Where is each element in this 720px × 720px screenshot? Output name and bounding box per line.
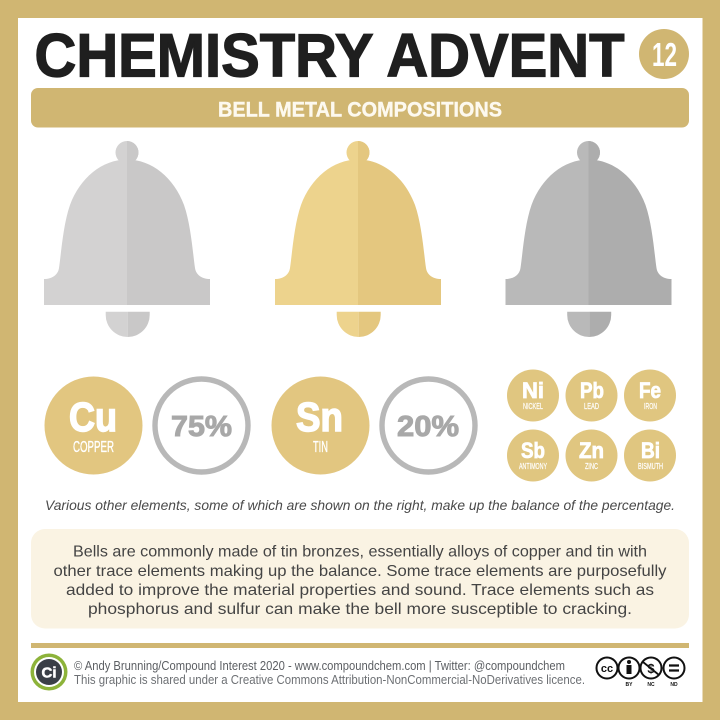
tin percentage ring: 20% — [397, 411, 459, 443]
licence icons: ND — [670, 682, 678, 688]
bell: copper-grey — [44, 141, 210, 337]
day number badge: 12 — [652, 36, 677, 73]
explanation panel: added to improve the material properties and sound. Trace elements such as — [66, 582, 654, 599]
explanation panel: other trace elements making up the balance. Some trace elements are purposefully — [54, 563, 666, 580]
explanation panel: Bells are commonly made of tin bronzes, essentially alloys of copper and tin with — [73, 544, 647, 560]
trace element: iron: IRON — [644, 402, 657, 411]
copper percentage ring: 75% — [171, 411, 232, 443]
trace element: iron: Fe — [639, 378, 661, 403]
caption: Various other elements, some of which are shown on the right, make up the balance of the percentage. — [45, 497, 675, 513]
subtitle banner — [31, 88, 689, 128]
footer rule — [31, 643, 689, 648]
trace element: antimony — [507, 430, 559, 482]
tin element circle: Sn — [296, 394, 343, 440]
trace element: zinc — [566, 430, 618, 482]
bell: gold — [275, 141, 441, 337]
trace element: zinc: ZINC — [585, 462, 598, 471]
day number badge — [639, 29, 689, 79]
trace element: nickel — [507, 370, 559, 422]
copper element circle — [44, 376, 142, 474]
Compound Interest logo: Ci — [42, 664, 56, 682]
trace element: antimony: ANTIMONY — [519, 462, 547, 471]
copper percentage ring — [155, 379, 248, 472]
trace element: nickel: Ni — [522, 378, 544, 403]
Compound Interest logo — [30, 654, 68, 690]
copper element circle: COPPER — [73, 439, 114, 456]
bell: dark grey — [506, 141, 672, 337]
subtitle banner: BELL METAL COMPOSITIONS — [218, 98, 502, 122]
tin element circle: TIN — [313, 439, 328, 456]
credit line: © Andy Brunning/Compound Interest 2020 - www.compoundchem.com | Twitter: @compoundchem — [74, 659, 565, 673]
title: CHEMISTRY ADVENT — [34, 22, 624, 90]
trace element: bismuth — [624, 430, 676, 482]
trace element: lead: LEAD — [584, 402, 599, 411]
trace element: bismuth: BISMUTH — [638, 462, 663, 471]
trace element: bismuth: Bi — [641, 438, 660, 463]
trace element: iron — [624, 370, 676, 422]
trace element: antimony: Sb — [521, 438, 545, 463]
copper element circle: Cu — [69, 394, 117, 440]
licence line: This graphic is shared under a Creative Commons Attribution-NonCommercial-NoDerivatives licence. — [74, 673, 585, 687]
licence icons: cc — [601, 663, 613, 675]
explanation panel — [31, 529, 689, 628]
tin element circle — [272, 376, 370, 474]
trace element: zinc: Zn — [579, 438, 604, 463]
licence icons: $ — [647, 661, 655, 676]
trace element: nickel: NICKEL — [523, 402, 543, 411]
licence icons — [596, 658, 684, 688]
trace element: lead — [566, 370, 618, 422]
licence icons: BY — [626, 682, 633, 688]
tin percentage ring — [382, 379, 475, 472]
trace element: lead: Pb — [580, 378, 604, 403]
explanation panel: phosphorus and sulfur can make the bell more susceptible to cracking. — [88, 601, 632, 618]
licence icons: NC — [647, 682, 655, 688]
